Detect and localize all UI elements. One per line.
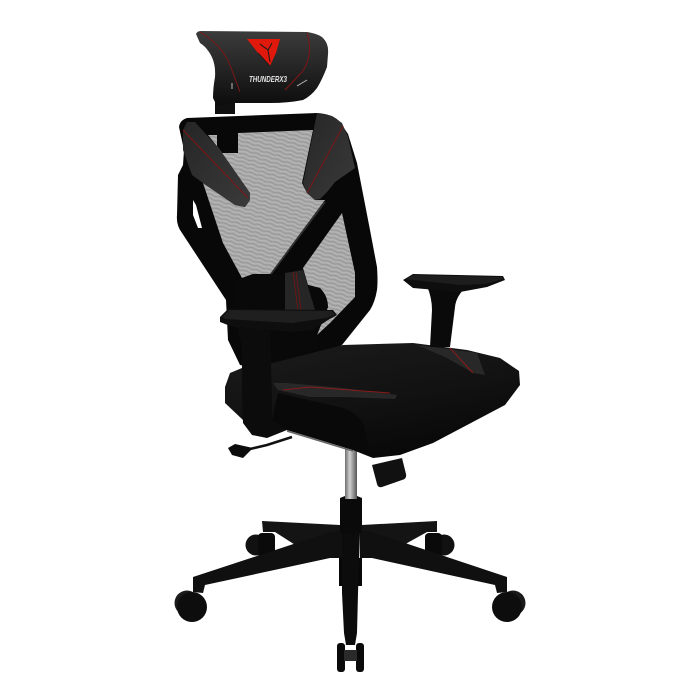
backrest frame <box>177 113 378 372</box>
caster: left <box>174 590 207 622</box>
armrest post: right <box>427 286 467 347</box>
headrest gap highlights <box>232 80 307 89</box>
tilt knob <box>372 458 406 487</box>
stitch: back left <box>183 130 248 198</box>
stitch: headrest left <box>200 32 240 92</box>
stitch: lumbar <box>293 272 301 310</box>
caster: back right <box>425 533 454 557</box>
stitch: back right <box>307 126 343 193</box>
seat panel: right <box>417 345 485 375</box>
armrest pad top: left <box>222 310 335 323</box>
headrest <box>196 31 328 106</box>
armrest: left <box>220 309 337 438</box>
leg: front left <box>193 530 342 593</box>
lumbar support <box>233 270 328 365</box>
stitch: seat front <box>283 387 390 393</box>
seat panel: front <box>273 383 397 399</box>
armrest pad top: right <box>405 275 503 285</box>
armrest pad: left <box>220 309 337 332</box>
base: five-star legs with casters <box>174 496 526 672</box>
caster: front <box>337 643 364 672</box>
neck support <box>215 100 235 114</box>
leg pieces behind the front leg <box>339 558 362 586</box>
leg: back right <box>360 521 437 547</box>
caster: right <box>492 590 526 622</box>
leg: front right <box>360 530 507 593</box>
hub <box>340 496 362 533</box>
seat cushion <box>225 343 520 458</box>
armrest pad: right <box>403 274 505 292</box>
mesh: centre <box>203 130 325 278</box>
panel: back right wing <box>303 113 355 200</box>
leg: front centre <box>342 533 360 645</box>
caster: back left <box>246 533 275 557</box>
logo: wordmark: THUNDERX3 <box>249 74 287 84</box>
panel: back left wing <box>183 122 250 207</box>
armrest post: left <box>237 325 287 438</box>
armrest: right <box>403 274 505 347</box>
stitch: headrest right <box>285 33 310 90</box>
gas lift cylinder <box>345 445 357 499</box>
seat front band <box>272 393 371 457</box>
side frame opening <box>193 200 202 228</box>
logo: red emblem <box>247 39 280 66</box>
mesh: right <box>303 213 355 335</box>
lumbar tab <box>285 270 315 310</box>
leg: back left <box>262 521 342 548</box>
diagonal band highlight <box>271 202 325 274</box>
recline lever <box>228 437 292 458</box>
stitch: seat right <box>450 348 473 373</box>
under-seat mechanism <box>287 431 353 451</box>
